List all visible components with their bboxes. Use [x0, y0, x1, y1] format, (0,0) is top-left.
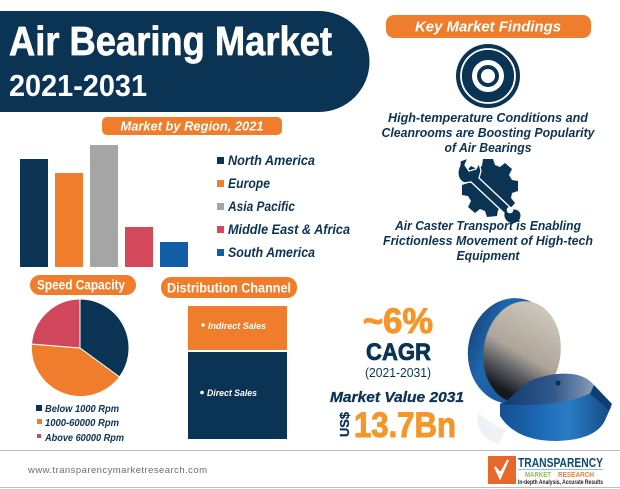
logo: transparency market research: MARKET — [525, 472, 552, 479]
text: finding two: Air Caster Transport is Enabling — [394, 219, 581, 233]
text: finding one: of Air Bearings — [444, 141, 532, 155]
stat: CAGR — [363, 302, 433, 380]
heading: key market findings: Key Market Findings — [415, 20, 561, 36]
stat: market value 2031: 13.7Bn — [354, 406, 456, 445]
heading: market by region: Market by Region, 2021 — [120, 118, 264, 134]
logo: transparency market research: RESEARCH — [558, 472, 594, 479]
heading: key market findings — [386, 15, 591, 38]
heading: distribution channel: Distribution Channel — [167, 280, 291, 296]
legend: regions: Europe — [228, 176, 270, 191]
footer url: www.transparencymarketresearch.com — [27, 465, 207, 476]
heading: market by region — [102, 117, 282, 135]
logo: transparency market research: TRANSPARENCY — [518, 456, 604, 470]
icon: wrench and gear — [458, 158, 521, 224]
stat: CAGR: CAGR — [366, 339, 431, 366]
heading: speed capacity — [30, 275, 136, 295]
icon: air bearing ring — [456, 44, 520, 108]
image: air bearing discs — [461, 292, 612, 444]
stacked bar: distribution channel: Indirect Sales — [208, 321, 266, 332]
stacked bar: distribution channel: Direct Sales — [207, 388, 257, 399]
stat: CAGR: ~6% — [363, 302, 433, 341]
bar chart: market by region — [20, 145, 188, 267]
pie chart: speed capacity — [31, 299, 129, 397]
heading: speed capacity: Speed Capacity — [37, 278, 125, 292]
legend: regions — [217, 153, 350, 260]
title banner: 2021-2031 — [9, 68, 147, 103]
text: finding one: Cleanrooms are Boosting Popularity — [382, 126, 596, 140]
title banner — [0, 11, 370, 112]
footer rule bottom — [0, 487, 620, 488]
legend: regions: South America — [228, 245, 315, 260]
footer rule top — [0, 450, 620, 451]
stat: market value 2031: Market Value 2031 — [330, 389, 464, 406]
text: finding one: High-temperature Conditions and — [388, 111, 588, 125]
logo: transparency market research — [488, 456, 604, 486]
legend: speed capacity: Below 1000 Rpm — [45, 404, 119, 415]
heading: distribution channel — [161, 277, 297, 298]
stat: CAGR: (2021-2031) — [365, 365, 431, 380]
legend: regions: Middle East & Africa — [228, 222, 350, 237]
title banner: Air Bearing Market — [9, 18, 332, 64]
legend: speed capacity: 1000-60000 Rpm — [45, 418, 119, 429]
logo: transparency market research: In-depth Analysis, Accurate Results — [518, 480, 604, 486]
text: finding two: Equipment — [456, 249, 520, 263]
stacked bar: distribution channel — [188, 306, 287, 439]
legend: regions: North America — [228, 153, 315, 168]
text: finding two: Frictionless Movement of High-tech — [383, 234, 593, 248]
legend: speed capacity — [36, 404, 124, 444]
stat: market value 2031 — [330, 389, 464, 445]
stat: market value 2031: US$ — [337, 411, 352, 437]
text: finding two — [383, 219, 593, 263]
legend: regions: Asia Pacific — [227, 199, 295, 214]
legend: speed capacity: Above 60000 Rpm — [44, 433, 124, 444]
text: finding one — [382, 111, 596, 155]
